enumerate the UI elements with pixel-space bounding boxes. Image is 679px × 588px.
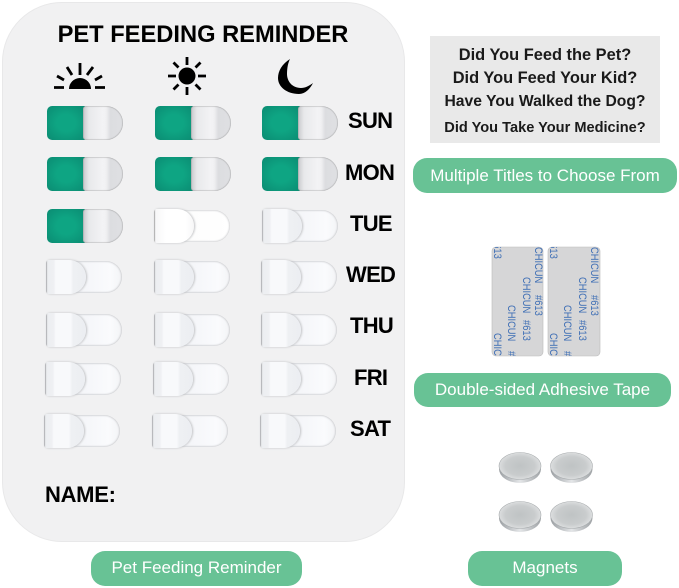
label: NAME: NAME:: [45, 482, 116, 507]
icon: adhesive tape strips: CHICUN: [588, 247, 600, 283]
caption: Double-sided Adhesive Tape: Double-sided Adhesive Tape: [435, 380, 650, 399]
icon: adhesive tape strips: #613: [520, 320, 532, 341]
text: title options: Did You Feed Your Kid?: [453, 69, 637, 87]
label: WED: WED: [346, 262, 395, 287]
icon: adhesive tape strips: CHICUN: [576, 277, 588, 313]
caption: Magnets: Magnets: [512, 558, 578, 577]
icon: adhesive tape strips: CHICUN: [561, 305, 573, 341]
icon: adhesive tape strips: CHICUN: [505, 305, 517, 341]
icon: moon: [278, 59, 313, 94]
label: TUE: TUE: [350, 211, 392, 236]
icon: adhesive tape strips: #613: [532, 295, 544, 316]
caption: Pet Feeding Reminder: Pet Feeding Reminder: [111, 558, 282, 577]
icon: sunrise: [54, 63, 105, 89]
label: MON: MON: [345, 160, 394, 185]
label: SAT: SAT: [350, 416, 390, 441]
icon: adhesive tape strips: #613: [588, 295, 600, 316]
label: SUN: SUN: [348, 108, 392, 133]
icon: sun: [168, 57, 206, 95]
text: title options: Have You Walked the Dog?: [444, 93, 646, 110]
label: FRI: FRI: [354, 365, 387, 390]
slider row: MON: [47, 157, 338, 191]
caption: Double-sided Adhesive Tape: [414, 373, 671, 407]
icon: magnets: [498, 452, 593, 532]
title: PET FEEDING REMINDER: [58, 22, 348, 48]
caption: Multiple Titles: Multiple Titles to Choose From: [430, 166, 660, 185]
slider row: WED: [46, 259, 337, 295]
caption: Magnets: [468, 551, 622, 586]
text: title options: Did You Feed the Pet?: [459, 46, 631, 64]
icon: adhesive tape strips: [492, 246, 600, 356]
panel: title strips: [430, 36, 660, 143]
label: THU: THU: [350, 313, 393, 338]
text: title options: [444, 46, 646, 136]
caption: Pet Feeding Reminder: [91, 551, 302, 586]
slider row: FRI: [45, 361, 337, 397]
slider row: TUE: [47, 208, 338, 244]
slider row: SUN: [47, 106, 338, 140]
text: title options: Did You Take Your Medicine?: [444, 120, 646, 136]
caption: Multiple Titles: [413, 158, 677, 193]
icon: adhesive tape strips: CHICUN: [532, 247, 544, 283]
icon: adhesive tape strips: #613: [576, 320, 588, 341]
slider row: THU: [46, 312, 337, 348]
icon: adhesive tape strips: CHICUN: [520, 277, 532, 313]
panel: pet feeding reminder board: [2, 2, 405, 542]
slider row: SAT: [44, 413, 336, 449]
